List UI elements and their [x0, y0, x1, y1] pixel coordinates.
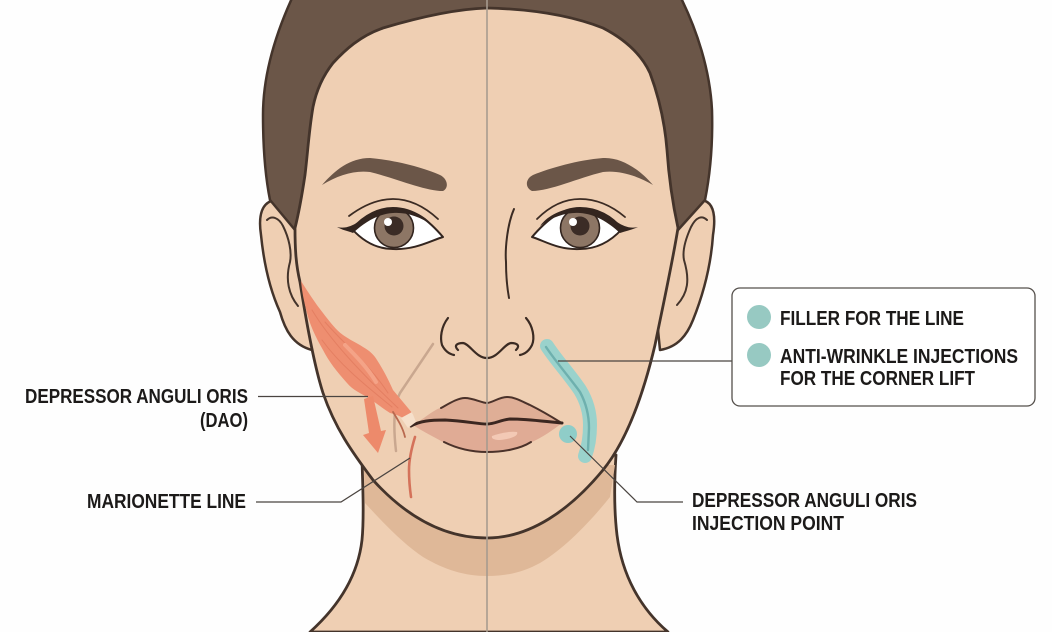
- filler band: [547, 346, 590, 456]
- left ear inner fold: [267, 218, 298, 306]
- left eye: [337, 199, 443, 249]
- right pupil: [570, 216, 590, 236]
- right ear outline: [650, 200, 714, 350]
- legend box: [732, 288, 1035, 406]
- leader line: marionette: [256, 458, 410, 502]
- leader line: filler: [558, 360, 732, 362]
- muscle body: [301, 281, 413, 418]
- upper lip: [413, 397, 562, 425]
- right eye white: [532, 208, 622, 249]
- midline: [486, 0, 488, 632]
- neck: [310, 455, 668, 632]
- left ear outline: [260, 200, 320, 350]
- left ear: [260, 200, 320, 350]
- right highlight: [569, 218, 577, 226]
- mouth line: [411, 419, 562, 426]
- leader line: injection point: [570, 436, 683, 502]
- label line two: (DAO): [200, 409, 248, 432]
- right iris group: [560, 208, 600, 248]
- upper lip contour: [441, 397, 560, 422]
- label: injection point: [692, 489, 917, 535]
- right eye: [532, 199, 638, 249]
- right iris: [560, 208, 600, 248]
- face illustration: [260, 0, 714, 632]
- injection label line one: DEPRESSOR ANGULI ORIS: [692, 489, 917, 512]
- right eyeliner: [540, 208, 638, 233]
- label: marionette line: MARIONETTE LINE: [87, 490, 246, 513]
- left iris group: [374, 208, 414, 248]
- leader line: DAO: [258, 396, 368, 398]
- hair: [263, 0, 712, 240]
- injection label line two: INJECTION POINT: [692, 512, 844, 535]
- filler centre line: [546, 347, 589, 450]
- lower lip contour: [444, 442, 531, 452]
- left iris: [374, 208, 414, 248]
- legend text: filler: FILLER FOR THE LINE: [780, 307, 964, 330]
- legend text line two: FOR THE CORNER LIFT: [780, 367, 975, 390]
- nose: [441, 318, 533, 358]
- label line one: DEPRESSOR ANGULI ORIS: [25, 385, 248, 408]
- left pupil: [384, 216, 404, 236]
- face shape: [295, 8, 678, 538]
- lips: [411, 397, 562, 452]
- right nose wing: [520, 318, 533, 355]
- left highlight: [384, 218, 392, 226]
- neck shadow: [364, 465, 615, 576]
- right ear: [650, 200, 714, 350]
- legend text line one: ANTI-WRINKLE INJECTIONS: [780, 345, 1018, 368]
- muscle insertion: [401, 412, 416, 428]
- left nose wing: [441, 318, 454, 355]
- downward arrow: [363, 396, 386, 453]
- left eyelid crease: [349, 199, 438, 219]
- left eyebrow: [322, 158, 447, 191]
- legend dot: filler: [747, 305, 771, 329]
- muscle highlight: [345, 345, 376, 382]
- nose bridge line: [506, 209, 514, 298]
- lower lip: [413, 419, 562, 452]
- legend frame: [732, 288, 1035, 406]
- left eyeliner: [337, 208, 433, 233]
- lip highlight: [492, 432, 517, 440]
- injection point dot: [559, 425, 577, 443]
- left eye white: [352, 208, 443, 249]
- right eyebrow: [527, 158, 653, 191]
- legend dot: anti-wrinkle: [747, 343, 771, 367]
- tan nasolabial line: [394, 344, 433, 451]
- label: depressor anguli oris: [25, 385, 248, 432]
- nostrils and septum: [456, 343, 518, 358]
- muscle fibres: [312, 310, 398, 408]
- legend text: anti-wrinkle: [780, 345, 1018, 390]
- muscle tail: [393, 412, 405, 437]
- marionette line: [409, 437, 415, 497]
- DAO muscle: [301, 281, 416, 437]
- right ear inner fold: [677, 217, 707, 305]
- right eyelid crease: [537, 199, 625, 219]
